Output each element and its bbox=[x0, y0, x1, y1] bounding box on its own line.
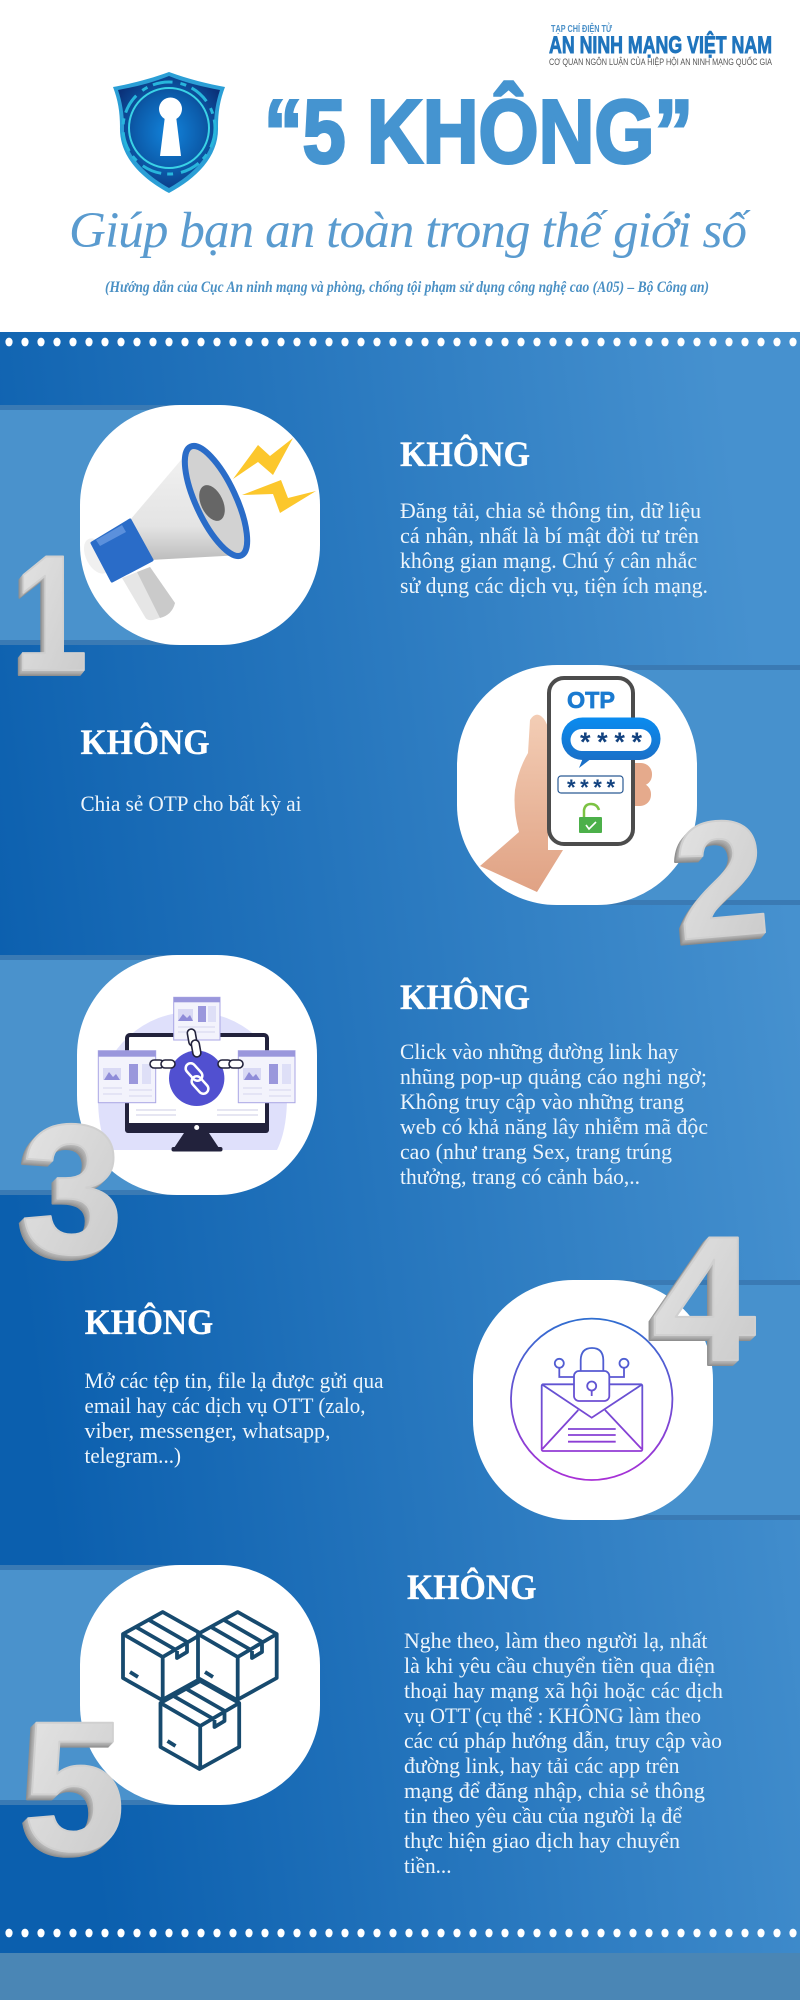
number 4: 4 bbox=[652, 1199, 756, 1398]
number 4: 4 bbox=[649, 1202, 753, 1401]
text block 3: cao (như trang Sex, trang trúng bbox=[400, 1139, 672, 1164]
box right bbox=[198, 1612, 277, 1700]
number 3: 3 bbox=[17, 1091, 119, 1297]
text block 5: đường link, hay tải các app trên bbox=[404, 1753, 680, 1778]
dotted row bottom bbox=[0, 1927, 800, 1939]
text block 4: Mở các tệp tin, file lạ được gửi qua bbox=[84, 1368, 384, 1393]
number 2: 2 bbox=[667, 783, 775, 975]
text block 1: sử dụng các dịch vụ, tiện ích mạng. bbox=[400, 573, 708, 598]
number 3: 3 bbox=[21, 1087, 123, 1293]
logo: magazine masthead: TẠP CHÍ ĐIỆN TỬ bbox=[551, 22, 613, 35]
number 3: 3 bbox=[18, 1090, 120, 1296]
text block 5: tiền... bbox=[404, 1853, 452, 1878]
text block 5: tin theo yêu cầu của người lạ để bbox=[404, 1803, 682, 1828]
number 1: 1 bbox=[13, 522, 87, 706]
icon: boxes card bbox=[80, 1565, 320, 1805]
text block 5: là khi yêu cầu chuyển tiền qua điện bbox=[404, 1653, 715, 1678]
icon: shield with keyhole bbox=[113, 72, 225, 193]
number 4: 4 bbox=[647, 1204, 751, 1403]
number 5: 5 bbox=[23, 1684, 125, 1890]
icon: OTP phone card: OTP bbox=[567, 687, 615, 713]
window right bbox=[238, 1051, 295, 1103]
text block 4: viber, messenger, whatsapp, bbox=[84, 1418, 330, 1443]
icon: OTP phone card: **** bbox=[567, 775, 615, 800]
number 1: 1 bbox=[10, 526, 84, 710]
number 4: 4 bbox=[650, 1201, 754, 1400]
heading 4: KHÔNG bbox=[85, 1302, 213, 1342]
source note: (Hướng dẫn của Cục An ninh mạng và phòng, chống tội phạm sử dụng công nghệ cao (A05) – Bộ Công an) bbox=[105, 279, 709, 296]
number 5: 5 bbox=[18, 1689, 120, 1895]
number 4: 4 bbox=[651, 1200, 755, 1399]
text block 5: thoại hay mạng xã hội hoặc các dịch bbox=[404, 1678, 723, 1703]
number 2: 2 bbox=[664, 788, 771, 979]
text block 2: Chia sẻ OTP cho bất kỳ ai bbox=[80, 791, 302, 816]
text block 1: Đăng tải, chia sẻ thông tin, dữ liệu bbox=[400, 498, 701, 523]
text block 3: Không truy cập vào những trang bbox=[400, 1089, 684, 1114]
subtitle script: Giúp bạn an toàn trong thế giới số bbox=[69, 203, 750, 259]
number 5: 5 bbox=[21, 1686, 123, 1892]
window top bbox=[174, 997, 220, 1040]
text block 5: vụ OTT (cụ thể : KHÔNG làm theo bbox=[404, 1703, 701, 1728]
chain links to windows bbox=[150, 1028, 243, 1068]
text block 4 bbox=[84, 1368, 384, 1468]
number 5: 5 bbox=[20, 1687, 122, 1893]
number 2: 2 bbox=[665, 785, 773, 977]
footer band bbox=[0, 1953, 800, 2000]
text block 3: nhũng pop-up quảng cáo nghi ngờ; bbox=[400, 1064, 707, 1089]
panel: item 4 band bbox=[600, 1280, 800, 1520]
text block 3 bbox=[400, 1039, 708, 1189]
text block 4: email hay các dịch vụ OTT (zalo, bbox=[84, 1393, 366, 1418]
number 3: 3 bbox=[19, 1089, 121, 1295]
text block 4: telegram...) bbox=[84, 1443, 181, 1468]
number 5: 5 bbox=[19, 1688, 121, 1894]
number 1: 1 bbox=[11, 525, 85, 709]
icon: OTP phone card bbox=[457, 665, 697, 905]
icon: OTP phone card: **** bbox=[580, 727, 642, 757]
dotted row top bbox=[0, 336, 800, 348]
heading 2: KHÔNG bbox=[80, 722, 210, 762]
title: “5 KHÔNG” bbox=[264, 80, 693, 182]
icon: locked envelope card bbox=[473, 1280, 713, 1520]
box left bbox=[123, 1612, 202, 1700]
logo: magazine masthead bbox=[549, 22, 773, 68]
header background bbox=[0, 0, 800, 332]
number 1: 1 bbox=[14, 521, 88, 705]
text block 1: cá nhân, nhất là bí mật đời tư trên bbox=[400, 523, 699, 548]
text block 5: mạng để đăng nhập, chia sẻ thông bbox=[404, 1778, 705, 1803]
number 2: 2 bbox=[663, 789, 770, 980]
number 4: 4 bbox=[648, 1203, 752, 1402]
panel: item 3 band bbox=[0, 955, 200, 1195]
number 5: 5 bbox=[22, 1685, 124, 1891]
text block 3: web có khả năng lây nhiễm mã độc bbox=[400, 1114, 708, 1139]
icon: megaphone card bbox=[79, 405, 320, 645]
text block 5: Nghe theo, làm theo người lạ, nhất bbox=[404, 1628, 708, 1653]
box bottom bbox=[160, 1681, 239, 1769]
icon: monitor with links card bbox=[77, 955, 317, 1195]
text block 5 bbox=[404, 1628, 723, 1878]
text block 3: Click vào những đường link hay bbox=[400, 1039, 678, 1064]
text block 1 bbox=[400, 498, 708, 598]
panel: item 5 band bbox=[0, 1565, 200, 1805]
heading 5: KHÔNG bbox=[407, 1567, 536, 1607]
heading 1: KHÔNG bbox=[400, 434, 530, 474]
window left bbox=[98, 1051, 156, 1103]
text block 5: các cú pháp hướng dẫn, truy cập vào bbox=[404, 1728, 722, 1753]
panel: item 2 band bbox=[580, 665, 800, 905]
number 3: 3 bbox=[20, 1088, 122, 1294]
number 2: 2 bbox=[664, 787, 772, 978]
number 3: 3 bbox=[16, 1092, 118, 1298]
text block 1: không gian mạng. Chú ý cân nhắc bbox=[400, 548, 697, 573]
text block 3: thưởng, trang có cảnh báo,.. bbox=[400, 1164, 640, 1189]
number 2: 2 bbox=[666, 784, 774, 976]
panel: item 1 band bbox=[0, 405, 200, 645]
number 1: 1 bbox=[13, 523, 86, 707]
heading 3: KHÔNG bbox=[400, 977, 530, 1017]
text block 5: thực hiện giao dịch hay chuyển bbox=[404, 1828, 680, 1853]
chain link glyph bbox=[184, 1061, 210, 1096]
number 1: 1 bbox=[12, 524, 85, 708]
